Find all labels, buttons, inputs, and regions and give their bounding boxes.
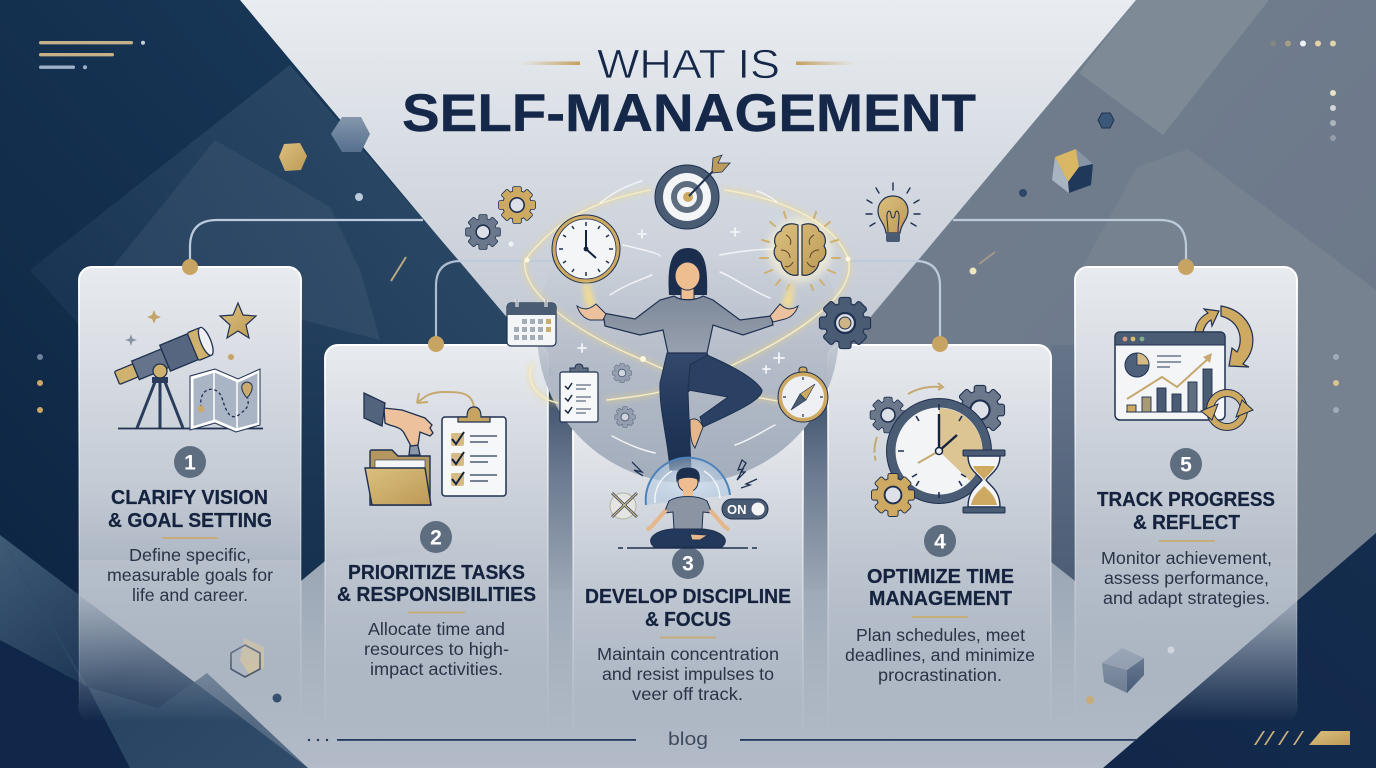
- standing leg and hips: [660, 353, 714, 470]
- number badge 3: [672, 547, 704, 579]
- icon: star: [220, 303, 256, 338]
- number badge 5: 5: [1180, 454, 1192, 476]
- body text 4: Plan schedules, meet: [856, 625, 1025, 645]
- body text 2: [364, 619, 509, 679]
- person: [647, 468, 729, 547]
- connector lines: [190, 220, 1186, 344]
- background: right slate panel: [688, 0, 1376, 768]
- icon: dark gear: [820, 298, 870, 348]
- heading 2: [337, 561, 536, 606]
- background: bottom right dark triangle: [1103, 533, 1376, 768]
- title line 1: WHAT IS: [597, 41, 780, 87]
- panel: card 3: [573, 420, 803, 740]
- heading 1: & GOAL SETTING: [108, 509, 272, 532]
- body text 3: [597, 644, 779, 704]
- icon: calendar: [507, 299, 556, 346]
- body text 3: Maintain concentration: [597, 644, 779, 664]
- icon: clock with time wedge: [886, 398, 992, 504]
- body text 3: veer off track.: [632, 684, 743, 704]
- figure: woman in tree pose: [577, 248, 798, 470]
- icon: compass: [778, 367, 828, 422]
- heading 1: CLARIFY VISION: [111, 486, 268, 509]
- panel: card 4: [828, 336, 1051, 735]
- number badge 4: 4: [934, 530, 946, 554]
- background: shaded gaps beside the centre card: [548, 400, 828, 590]
- icon: gears behind clock: [870, 386, 1004, 434]
- body text 3: and resist impulses to: [602, 664, 774, 684]
- body text 5: Monitor achievement,: [1101, 548, 1272, 568]
- torso and arms: [603, 296, 773, 353]
- footer: blog line: blog: [668, 729, 708, 749]
- neck: [681, 285, 694, 300]
- icon: clipboard: [442, 407, 506, 496]
- icon: folder: [365, 450, 431, 505]
- icon: lightning bolts: [632, 460, 757, 488]
- gears upper left: [466, 187, 535, 249]
- icon: hand: [364, 393, 433, 455]
- icon: motion arcs: [874, 383, 943, 468]
- top right dotted accent: [1270, 40, 1336, 141]
- body text 1: measurable goals for: [107, 565, 273, 585]
- body text 4: deadlines, and minimize: [845, 645, 1035, 665]
- top left accent lines: [39, 41, 145, 69]
- hands: [577, 304, 798, 322]
- number badge 4: [924, 525, 956, 557]
- icon: checklist: [560, 364, 598, 422]
- side dots left: [37, 354, 43, 413]
- spotlight circle behind figure: [537, 181, 839, 483]
- icon: meditating person in focus bubble: [610, 458, 768, 548]
- icon: hourglass: [963, 450, 1005, 513]
- heading 3: & FOCUS: [645, 608, 731, 631]
- icon: on toggle: [722, 499, 768, 519]
- icon: brain with rays: [760, 212, 840, 290]
- decorative shapes: [231, 113, 1174, 704]
- icon: analytics window: [1115, 332, 1225, 420]
- number badge 1: 1: [184, 452, 196, 474]
- title: [402, 41, 976, 143]
- body text 2: Allocate time and: [368, 619, 505, 639]
- number badge 5: [1170, 448, 1202, 480]
- icon: faded gears: [612, 364, 635, 427]
- icon: clock: [552, 215, 620, 283]
- connector dot 2: [428, 336, 444, 352]
- number badge 2: 2: [430, 526, 442, 550]
- title rule left: [520, 62, 580, 65]
- heading 5: & REFLECT: [1133, 511, 1240, 534]
- connector dot 1: [182, 259, 198, 275]
- connector dot 5: [1178, 259, 1194, 275]
- bottom right gold stripes: [1254, 731, 1350, 745]
- heading 3: [585, 585, 791, 631]
- icon: target with arrow: [655, 155, 730, 229]
- bent leg: [688, 355, 762, 427]
- side dots right: [1333, 354, 1339, 413]
- heading 5: TRACK PROGRESS: [1097, 488, 1275, 511]
- panel: card 2: [325, 336, 548, 735]
- icon: telescope and map: [111, 303, 263, 432]
- face: [675, 262, 700, 290]
- icon: arrow: [417, 392, 474, 412]
- number badge 2: [420, 521, 452, 553]
- icon: on toggle: ON: [727, 502, 746, 517]
- background: bottom left dark triangle: [0, 535, 308, 768]
- body text 5: [1101, 548, 1272, 608]
- body text 4: [845, 625, 1035, 685]
- icon: small cycle arrows: [1201, 393, 1253, 427]
- background: lower light band behind cards: [79, 540, 1297, 768]
- connector dot 4: [932, 336, 948, 352]
- body text 1: [107, 545, 273, 605]
- heading 2: & RESPONSIBILITIES: [337, 583, 536, 606]
- panel: card 5: [1075, 259, 1297, 722]
- body text 4: procrastination.: [878, 665, 1002, 685]
- body text 1: Define specific,: [129, 545, 251, 565]
- icon: gold gear: [872, 474, 914, 516]
- body text 2: resources to high-: [364, 639, 509, 659]
- heading 4: OPTIMIZE TIME: [867, 565, 1014, 588]
- heading 1: [108, 486, 272, 532]
- body text 5: and adapt strategies.: [1103, 588, 1270, 608]
- heading 3: DEVELOP DISCIPLINE: [585, 585, 791, 608]
- hand beams: [583, 283, 794, 307]
- body text 1: life and career.: [132, 585, 248, 605]
- background: gaps between the upper cards: [301, 345, 1075, 581]
- heading 5: [1097, 488, 1275, 534]
- body text 2: impact activities.: [370, 659, 503, 679]
- body text 5: assess performance,: [1104, 568, 1269, 588]
- orbit glow rings: [524, 190, 850, 403]
- background: left navy panel: [0, 0, 688, 768]
- icon: crossed distraction: [610, 493, 637, 519]
- foot: [690, 419, 703, 448]
- hair: [669, 248, 707, 295]
- number badge 1: [174, 446, 206, 478]
- number badge 3: 3: [682, 552, 694, 576]
- title line 2: SELF-MANAGEMENT: [402, 84, 976, 143]
- panel: card 1: [79, 259, 301, 722]
- icon: light bulb: [866, 183, 920, 242]
- heading 2: PRIORITIZE TASKS: [348, 561, 525, 584]
- title rule right: [796, 62, 856, 65]
- icon: big cycle arrow: [1195, 306, 1253, 367]
- heading 4: [867, 565, 1014, 610]
- heading 4: MANAGEMENT: [869, 587, 1012, 610]
- motion dashes and sparkles: [578, 181, 785, 453]
